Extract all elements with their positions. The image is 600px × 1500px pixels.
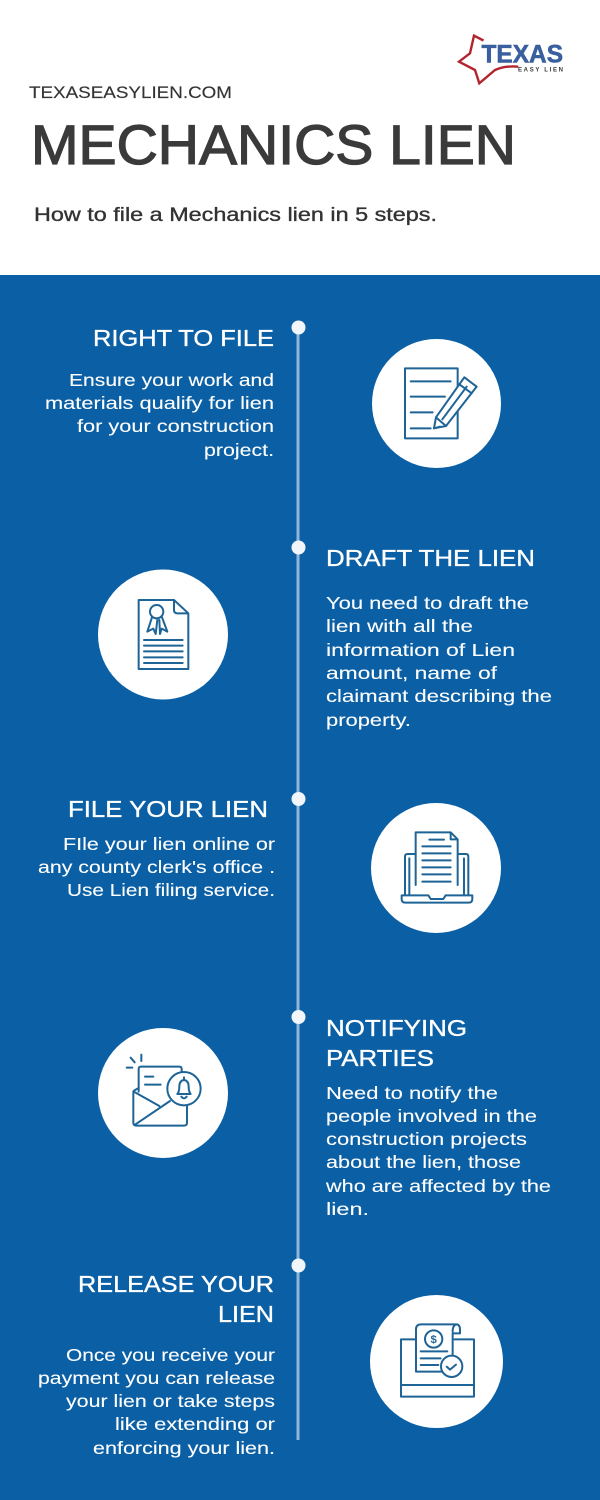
icon: certificate document [98, 570, 228, 700]
logo: EASY LIEN [518, 68, 563, 74]
icon: invoice with check: $ [431, 1334, 438, 1346]
step 4 text: about the lien, those [326, 1152, 521, 1172]
step 1 text: project. [204, 440, 274, 460]
step 1 text: materials qualify for lien [45, 393, 274, 413]
step 3 text [38, 796, 275, 900]
step 2 text: property. [326, 710, 411, 730]
icon: invoice with check [370, 1295, 503, 1428]
step 4 text: lien. [326, 1199, 369, 1219]
step 2 text: You need to draft the [326, 593, 529, 613]
step 3 text: any county clerk's office . [38, 857, 275, 877]
step 2 text: lien with all the [326, 616, 473, 636]
step 4 text: who are affected by the [325, 1176, 551, 1196]
step 2 text: claimant describing the [326, 686, 552, 706]
step 5 text: Once you receive your [66, 1345, 275, 1365]
step 1 text: RIGHT TO FILE [93, 325, 274, 351]
step 1 text [45, 325, 274, 460]
step 5 text: payment you can release [38, 1368, 275, 1388]
logo [459, 36, 563, 83]
step 2 text: DRAFT THE LIEN [326, 545, 535, 571]
icon: envelope with bell [98, 1028, 228, 1158]
step 5 text: LIEN [218, 1301, 274, 1327]
step 5 text [38, 1271, 275, 1458]
step 3 text: FIle your lien online or [63, 834, 275, 854]
logo: TEXAS [482, 40, 563, 68]
step 5 text: like extending or [115, 1414, 275, 1434]
step 2 text: amount, name of [326, 663, 497, 683]
step 4 text: NOTIFYING [326, 1015, 467, 1041]
site name: TEXASEASYLIEN.COM [29, 83, 232, 102]
icon: document and pencil [372, 339, 501, 468]
step 2 text [326, 545, 552, 730]
step 4 text: people involved in the [326, 1106, 537, 1126]
timeline [292, 320, 306, 1440]
step 3 text: FILE YOUR LIEN [68, 796, 268, 822]
subtitle: How to file a Mechanics lien in 5 steps. [34, 205, 437, 226]
step 1 text: for your construction [77, 416, 274, 436]
step 3 text: Use Lien filing service. [67, 880, 275, 900]
step 4 text: Need to notify the [326, 1083, 498, 1103]
step 1 text: Ensure your work and [69, 370, 274, 390]
icon: laptop with document [371, 803, 501, 933]
step 4 text [325, 1015, 551, 1219]
step 4 text: PARTIES [326, 1045, 434, 1071]
title: MECHANICS LIEN [31, 113, 516, 176]
step 5 text: your lien or take steps [66, 1391, 275, 1411]
step 5 text: enforcing your lien. [93, 1438, 275, 1458]
step 2 text: information of Lien [326, 640, 515, 660]
step 4 text: construction projects [326, 1129, 527, 1149]
step 5 text: RELEASE YOUR [78, 1271, 274, 1297]
